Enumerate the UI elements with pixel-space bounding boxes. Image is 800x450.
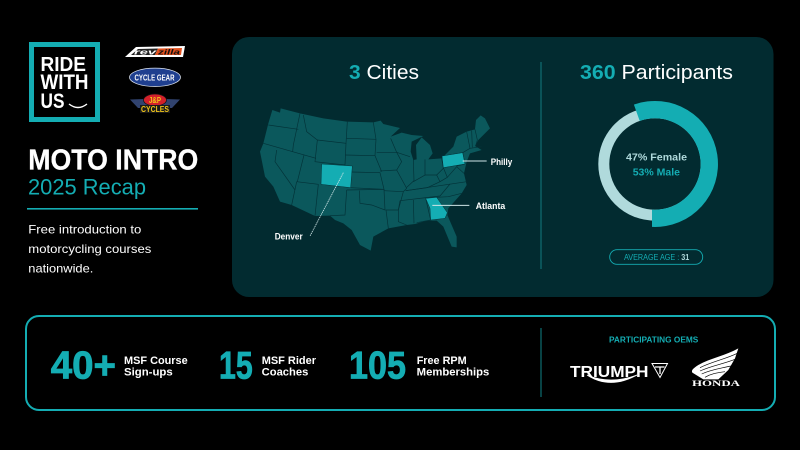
text block: description: Free introduction to: [28, 223, 142, 237]
highlighted state: Colorado: [321, 164, 352, 188]
label: Philly: Philly: [491, 157, 512, 167]
stat: 105 free RPM memberships: 105: [349, 344, 406, 387]
logo: Cycle Gear: CYCLE GEAR: [134, 72, 174, 82]
donut label: female: 47% Female: [626, 152, 687, 164]
heading: 360 Participants: 360 Participants: [580, 62, 733, 84]
panel: cities and participants: [232, 37, 774, 297]
stat: 40+ MSF course sign-ups: [51, 344, 188, 387]
label: Denver: Denver: [275, 232, 303, 242]
stat: 15 MSF rider coaches: 15: [219, 344, 253, 387]
donut label: male: 53% Male: [633, 167, 680, 179]
title: Moto Intro: MOTO INTRO: [28, 144, 198, 176]
logo: Honda: [692, 348, 740, 388]
stat: 40+ MSF course sign-ups: 40+: [51, 344, 116, 387]
donut chart: [604, 101, 718, 227]
logo: Cycle Gear: [130, 68, 180, 87]
logo: J&P Cycles: J&P: [149, 96, 162, 105]
heading: participating OEMs: PARTICIPATING OEMS: [609, 335, 699, 345]
pill: average age: AVERAGE AGE : 31: [624, 253, 690, 262]
text block: description: nationwide.: [28, 261, 93, 275]
stat: 40+ MSF course sign-ups: MSF Course: [124, 355, 188, 367]
stat: 105 free RPM memberships: [349, 344, 489, 387]
stat: 15 MSF rider coaches: [219, 344, 317, 387]
logo: Honda: HONDA: [692, 379, 740, 388]
logo: Ride With Us: RIDE: [40, 54, 86, 76]
highlighted state: Pennsylvania: [442, 153, 465, 168]
map: United States: [260, 108, 490, 251]
stat: 105 free RPM memberships: Free RPM: [417, 355, 467, 367]
panel: stats and OEMs: [26, 316, 775, 410]
logo: Triumph: TRIUMPH: [570, 364, 648, 381]
logo: Revzilla: rev: [134, 50, 158, 56]
stat: 105 free RPM memberships: Memberships: [417, 367, 489, 379]
logo: Revzilla: zilla: [156, 50, 180, 56]
callout line: Denver: [310, 173, 343, 236]
logo: J&P Cycles: [130, 94, 180, 114]
text block: description: [28, 223, 151, 275]
stat: 40+ MSF course sign-ups: Sign-ups: [124, 367, 173, 379]
logo: Ride With Us: WITH: [40, 71, 88, 94]
stat: 15 MSF rider coaches: Coaches: [262, 367, 308, 379]
logo: Revzilla: [125, 46, 185, 57]
callout line: Atlanta: [432, 204, 469, 207]
label: Atlanta: Atlanta: [476, 201, 506, 211]
stat: 15 MSF rider coaches: MSF Rider: [262, 355, 317, 367]
logo: J&P Cycles: CYCLES: [141, 105, 170, 114]
pill: average age: [610, 250, 703, 264]
callout line: Philly: [463, 159, 487, 162]
logo: Ride With Us: US: [40, 90, 64, 113]
logo: Ride With Us: [32, 44, 98, 120]
heading: 3 Cities: 3 Cities: [349, 62, 419, 84]
subtitle: 2025 Recap: 2025 Recap: [28, 174, 146, 199]
logo: Triumph: [570, 364, 668, 382]
highlighted state: Georgia: [426, 197, 447, 220]
text block: description: motorcycling courses: [28, 242, 151, 256]
